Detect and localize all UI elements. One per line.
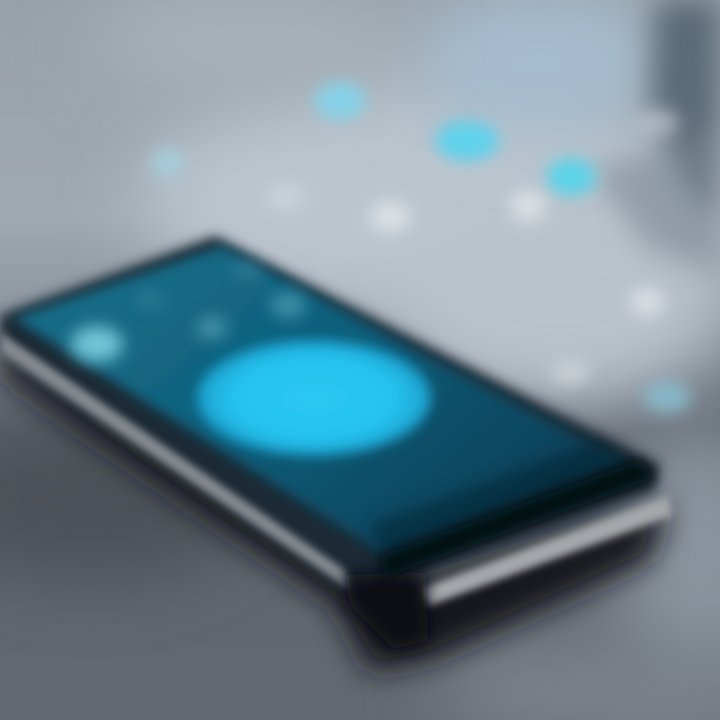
phone corner bbox=[345, 572, 428, 650]
phone front edge bbox=[422, 495, 672, 606]
blue dot bbox=[546, 158, 596, 196]
phone shadow bbox=[0, 345, 670, 672]
pale blue dot bbox=[150, 147, 186, 179]
large glowing circle bbox=[197, 340, 431, 456]
blue dot bbox=[435, 121, 499, 161]
screen lower dark band bbox=[370, 440, 655, 575]
phone bbox=[0, 236, 672, 650]
blue dot bbox=[314, 82, 366, 120]
pale blue dot bbox=[643, 381, 691, 413]
phone left side edge bbox=[0, 332, 350, 590]
phone back edge bbox=[0, 236, 660, 590]
screen dot left bbox=[71, 326, 123, 362]
dark corner: top right bbox=[590, 0, 720, 270]
screen dots bbox=[134, 261, 306, 340]
screen front black band bbox=[380, 460, 655, 578]
phone screen bbox=[14, 246, 625, 555]
white dots bbox=[265, 109, 680, 385]
floating data dots bbox=[150, 82, 691, 413]
